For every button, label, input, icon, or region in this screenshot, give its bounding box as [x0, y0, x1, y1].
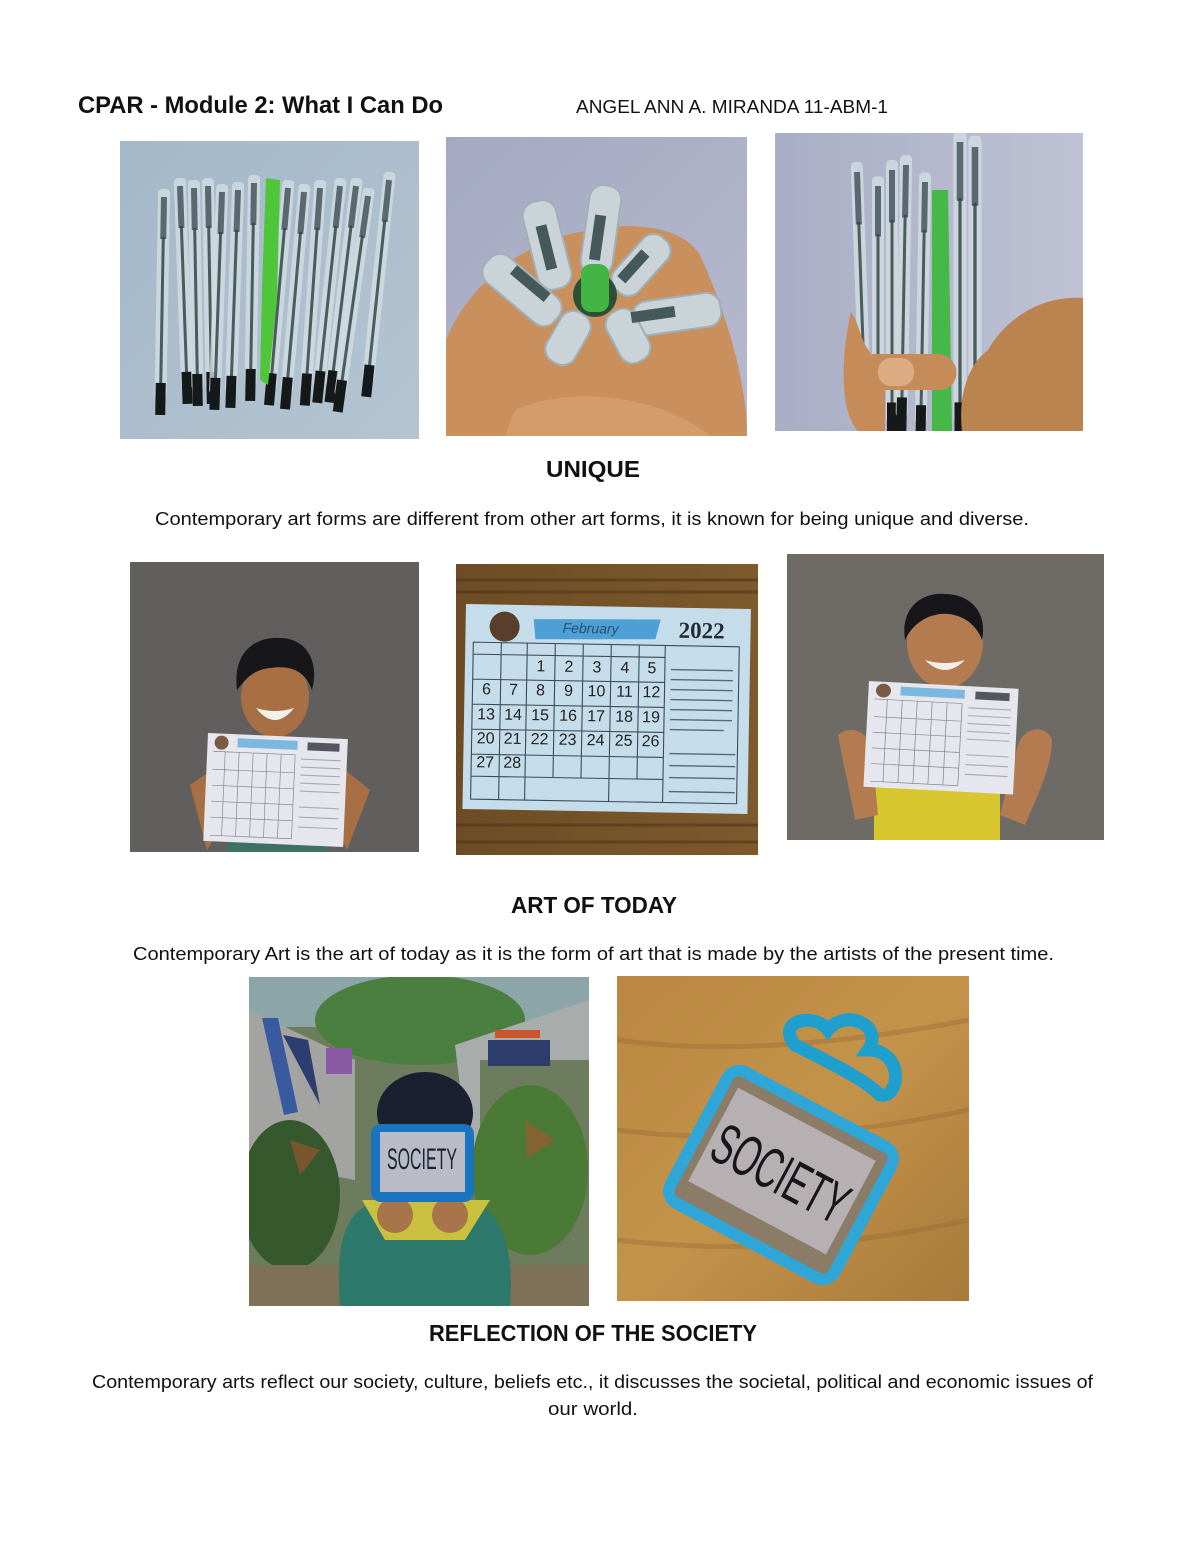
photo: February 2022 calendar on wood: 2 [564, 659, 574, 676]
text: reflection description [92, 1372, 1094, 1419]
photo: pens held like a flower [446, 137, 747, 436]
photo: February 2022 calendar on wood: 5 [647, 660, 657, 677]
photo: February 2022 calendar on wood: 11 [616, 684, 633, 701]
title: CPAR - Module 2: What I Can Do [78, 92, 443, 119]
photo: February 2022 calendar on wood: 7 [509, 682, 518, 699]
photo: February 2022 calendar on wood: 9 [564, 683, 573, 700]
photo: February 2022 calendar on wood: 23 [559, 732, 577, 749]
photo: February 2022 calendar on wood: 6 [482, 681, 491, 698]
text: reflection description: our world. [548, 1399, 638, 1419]
photo: child holding mirror outdoors [240, 975, 589, 1306]
photo: mirror on wood: SOCIETY [701, 1111, 860, 1237]
text: reflection description: Contemporary arts reflect our society, culture, beliefs etc., it discusses the societal, political and economic issues of [92, 1372, 1094, 1392]
photo: February 2022 calendar on wood: 10 [587, 683, 606, 700]
photo: February 2022 calendar on wood: 26 [642, 733, 660, 750]
photo: February 2022 calendar on wood: 25 [615, 733, 633, 750]
photo: February 2022 calendar on wood: 12 [642, 684, 661, 701]
author name: ANGEL ANN A. MIRANDA 11-ABM-1 [576, 97, 888, 117]
photo: February 2022 calendar on wood: 8 [536, 682, 545, 699]
photo: February 2022 calendar on wood: 17 [587, 708, 605, 725]
photo: February 2022 calendar on wood [456, 564, 758, 855]
photo: February 2022 calendar on wood: 13 [477, 706, 495, 724]
photo: boy holding calendar [130, 562, 419, 855]
icon: green pen [260, 178, 280, 385]
photo: February 2022 calendar on wood: 1 [536, 658, 546, 675]
photo: February 2022 calendar on wood: 20 [477, 730, 495, 748]
photo: February 2022 calendar on wood: 14 [504, 707, 522, 724]
text: unique description: Contemporary art forms are different from other art forms, it is known for being unique and diverse. [155, 509, 1029, 529]
photo: February 2022 calendar on wood: 3 [592, 659, 602, 676]
photo: February 2022 calendar on wood: February [562, 620, 620, 637]
heading: art of today: ART OF TODAY [511, 892, 677, 918]
photo: pens laid flat [120, 141, 419, 439]
photo: pens gripped in a fist [775, 131, 1083, 452]
photo: February 2022 calendar on wood: 15 [531, 707, 549, 724]
photo: February 2022 calendar on wood: 4 [620, 660, 630, 677]
heading: reflection of the society: REFLECTION OF THE SOCIETY [429, 1320, 757, 1346]
photo: February 2022 calendar on wood: 22 [531, 731, 549, 748]
icon: mirror handle [789, 1020, 895, 1095]
heading: unique: UNIQUE [546, 456, 640, 482]
photo: February 2022 calendar on wood: 24 [587, 732, 605, 749]
photo: February 2022 calendar on wood: 19 [642, 709, 660, 726]
photo: February 2022 calendar on wood: 21 [504, 731, 522, 748]
photo: child holding mirror outdoors: SOCIETY [387, 1143, 457, 1176]
photo: February 2022 calendar on wood: 27 [476, 754, 494, 772]
photo: February 2022 calendar on wood: 2022 [678, 618, 725, 644]
photo: February 2022 calendar on wood: 28 [503, 755, 521, 772]
photo: mirror on wood [617, 976, 969, 1301]
text: art of today description: Contemporary Art is the art of today as it is the form of art that is made by the artists of the present time. [133, 944, 1054, 964]
photo: girl holding calendar [787, 554, 1104, 840]
photo: February 2022 calendar on wood: 16 [559, 708, 577, 725]
photo: February 2022 calendar on wood: 18 [615, 709, 633, 726]
